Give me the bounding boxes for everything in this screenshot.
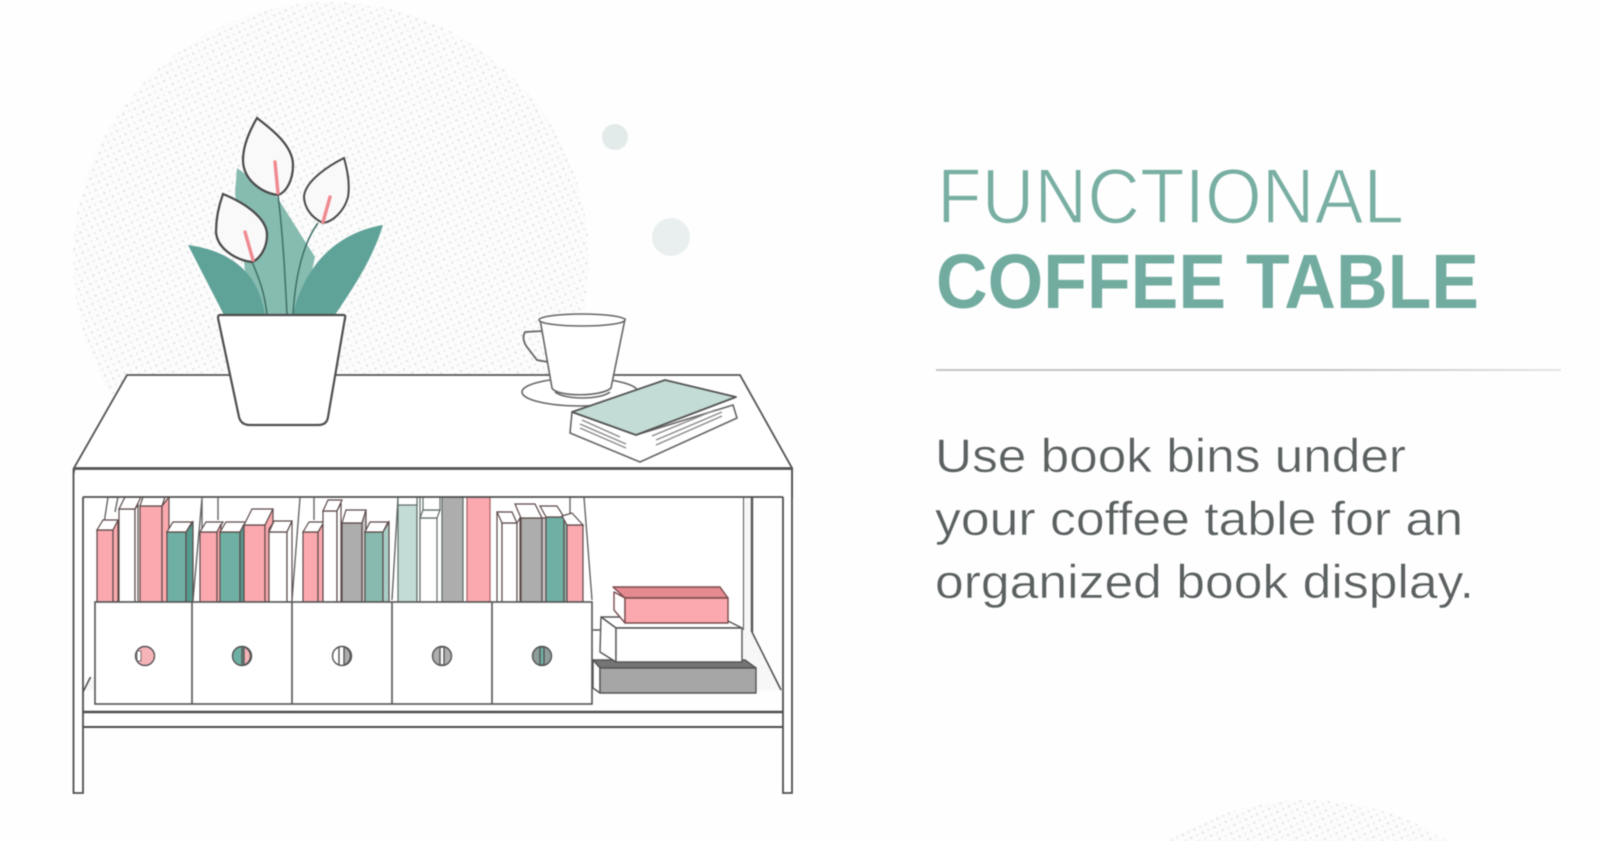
closed book on table bbox=[570, 380, 737, 462]
body text: organized book display. bbox=[935, 555, 1474, 608]
table back legs and shelf bbox=[83, 497, 783, 692]
grey book bbox=[593, 660, 756, 693]
plant in pot bbox=[188, 118, 383, 425]
dotted circle bottom right bbox=[1168, 800, 1448, 841]
five book bins bbox=[95, 602, 592, 704]
bin hole grey white bbox=[332, 646, 352, 666]
books in bin 4 bbox=[398, 497, 490, 602]
dotted background circle bbox=[73, 2, 589, 518]
body text bbox=[935, 429, 1474, 608]
title: coffee table: COFFEE TABLE bbox=[936, 239, 1479, 325]
stacked books bbox=[593, 587, 756, 693]
pot bbox=[218, 315, 345, 425]
flower right bbox=[304, 158, 349, 223]
table apron bbox=[74, 469, 792, 497]
body text: your coffee table for an bbox=[935, 492, 1463, 545]
bin hole teal bbox=[232, 646, 252, 666]
coffee cup and saucer bbox=[522, 314, 638, 406]
coffee table illustration bbox=[74, 314, 792, 793]
right leg bbox=[783, 469, 792, 793]
bin hole grey bbox=[432, 646, 452, 666]
right leaf bbox=[293, 225, 383, 315]
shelf board bbox=[83, 704, 783, 727]
divider line bbox=[936, 369, 1561, 371]
bin hole dark grey bbox=[532, 646, 552, 666]
large decorative dot bbox=[652, 218, 690, 256]
bin hole pink bbox=[136, 646, 154, 666]
books in bin 5 bbox=[497, 504, 583, 602]
flower left bbox=[216, 194, 267, 262]
back leaf bbox=[235, 168, 315, 315]
pink book bbox=[613, 587, 728, 623]
white book bbox=[600, 617, 742, 662]
body text: Use book bins under bbox=[935, 429, 1406, 482]
books in bin 3 bbox=[303, 500, 389, 602]
table top surface bbox=[74, 375, 792, 468]
left leg bbox=[74, 469, 83, 793]
bin back panels bbox=[103, 497, 592, 600]
stems bbox=[252, 195, 318, 315]
title: functional: FUNCTIONAL bbox=[937, 152, 1404, 240]
small decorative dot bbox=[602, 124, 628, 150]
books in bin 2 bbox=[200, 509, 292, 602]
left leaf bbox=[188, 245, 265, 315]
flower top bbox=[243, 118, 293, 195]
books in bin 1 bbox=[97, 497, 193, 602]
